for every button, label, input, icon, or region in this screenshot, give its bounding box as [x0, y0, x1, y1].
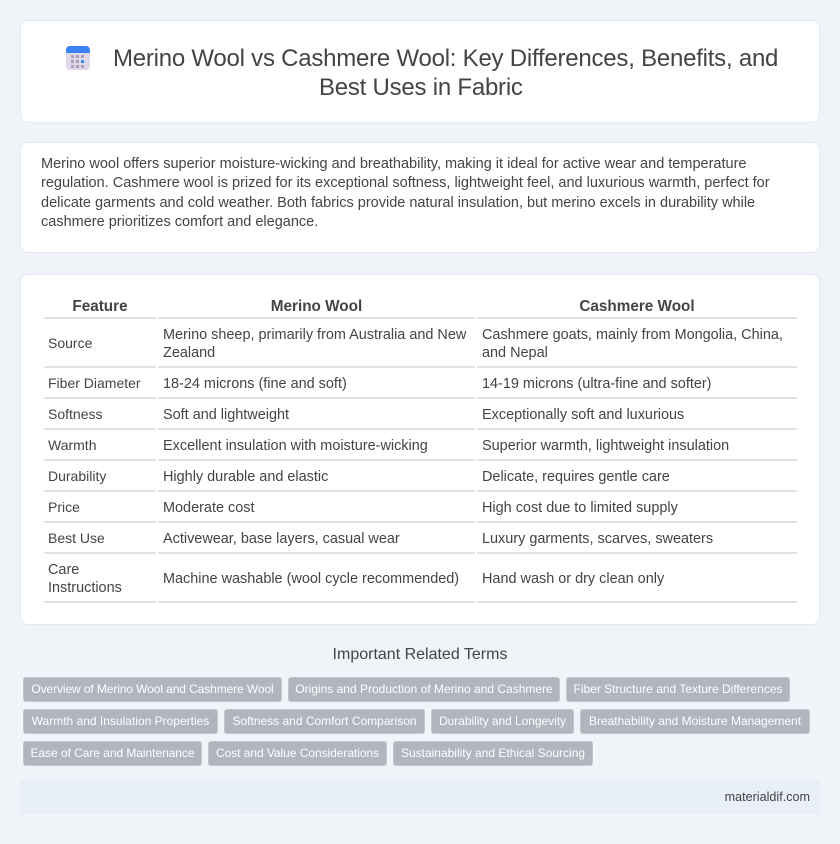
row: Care Instructions: Care: [48, 562, 79, 578]
row: Durability: Delicate, requires gentle care: [482, 469, 670, 485]
header: Merino Wool: Merino Wool: [271, 298, 362, 315]
row: Price: Moderate cost: [163, 500, 254, 516]
footer source text: materialdif.com: [725, 790, 810, 804]
row: Source: [48, 327, 783, 361]
tag: Durability and Longevity: [439, 714, 566, 728]
row: Durability: [48, 468, 670, 485]
row: Source: Cashmere goats, mainly from Mongolia, China,: [482, 327, 783, 343]
tag: Ease of Care and Maintenance: [30, 746, 195, 760]
row: Best Use: [48, 530, 713, 547]
row: Softness: Softness: [48, 406, 102, 422]
tag: [23, 677, 282, 702]
tag: [288, 677, 560, 702]
tag: [393, 741, 593, 766]
row: Price: Price: [48, 499, 80, 515]
row: Softness: Exceptionally soft and luxurious: [482, 407, 684, 423]
intro text: delicate garments and cold weather. Both fabrics provide natural insulation, but merino excels in durability while: [41, 194, 755, 210]
row: Price: High cost due to limited supply: [482, 500, 678, 516]
row: Warmth: Excellent insulation with moisture-wicking: [163, 438, 428, 454]
row: Care Instructions: [48, 562, 664, 596]
intro text: Merino wool offers superior moisture-wicking and breathability, making it ideal for active wear and temperature: [41, 156, 746, 172]
footer bar: [20, 780, 820, 814]
tag: [224, 709, 425, 734]
comparison table: [44, 298, 797, 603]
tag: Overview of Merino Wool and Cashmere Wool: [31, 682, 274, 696]
tag: Origins and Production of Merino and Cashmere: [295, 682, 553, 696]
header: Cashmere Wool: Cashmere Wool: [579, 298, 695, 315]
related terms tags: [23, 677, 810, 766]
title: Merino Wool vs Cashmere Wool: Key Differences, Benefits, and: [113, 45, 778, 72]
tag: [23, 741, 202, 766]
intro text: [41, 156, 770, 230]
row: Fiber Diameter: Fiber Diameter: [48, 375, 141, 391]
row: Softness: [48, 406, 684, 423]
row: Price: [48, 499, 678, 516]
row: Fiber Diameter: 14-19 microns (ultra-fine and softer): [482, 376, 712, 392]
row: Durability: Highly durable and elastic: [163, 469, 328, 485]
intro text: regulation. Cashmere wool is prized for its exceptional softness, lightweight feel, and luxurious warmth, perfect for: [41, 175, 770, 191]
row: Best Use: Best Use: [48, 530, 105, 546]
row: Care Instructions: Instructions: [48, 580, 122, 596]
row: Warmth: Warmth: [48, 437, 96, 453]
tag: Softness and Comfort Comparison: [232, 714, 417, 728]
tag: Cost and Value Considerations: [216, 746, 379, 760]
row: Durability: Durability: [48, 468, 106, 484]
panel: introduction: [20, 142, 820, 253]
tag: Breathability and Moisture Management: [589, 714, 801, 728]
row: Softness: Soft and lightweight: [163, 407, 289, 423]
tag: Sustainability and Ethical Sourcing: [401, 746, 585, 760]
tag: [23, 709, 218, 734]
heading: Important Related Terms: Important Related Terms: [333, 646, 507, 663]
row: Source: Source: [48, 335, 92, 351]
row: Source: Zealand: [163, 345, 215, 361]
title: [113, 45, 778, 101]
row: Fiber Diameter: [48, 375, 712, 392]
panel: comparison table: [20, 274, 820, 625]
row: Care Instructions: Machine washable (wool cycle recommended): [163, 571, 459, 587]
row: Source: and Nepal: [482, 345, 548, 361]
header panel: [20, 20, 820, 123]
tag: [566, 677, 790, 702]
row: Warmth: [48, 437, 729, 454]
row: Best Use: Luxury garments, scarves, sweaters: [482, 531, 713, 547]
row: Care Instructions: Hand wash or dry clean only: [482, 571, 664, 587]
header: Feature: Feature: [72, 298, 128, 315]
row: Best Use: Activewear, base layers, casual wear: [163, 531, 400, 547]
title: Best Uses in Fabric: [319, 74, 523, 101]
icon: calendar: [66, 46, 90, 70]
row: Warmth: Superior warmth, lightweight insulation: [482, 438, 729, 454]
tag: [208, 741, 387, 766]
intro text: cashmere prioritizes comfort and elegance.: [41, 214, 318, 230]
row: Source: Merino sheep, primarily from Australia and New: [163, 327, 466, 343]
tag: [431, 709, 574, 734]
tag: Fiber Structure and Texture Differences: [574, 682, 782, 696]
tag: Warmth and Insulation Properties: [32, 714, 209, 728]
tag: [580, 709, 810, 734]
row: Fiber Diameter: 18-24 microns (fine and soft): [163, 376, 347, 392]
